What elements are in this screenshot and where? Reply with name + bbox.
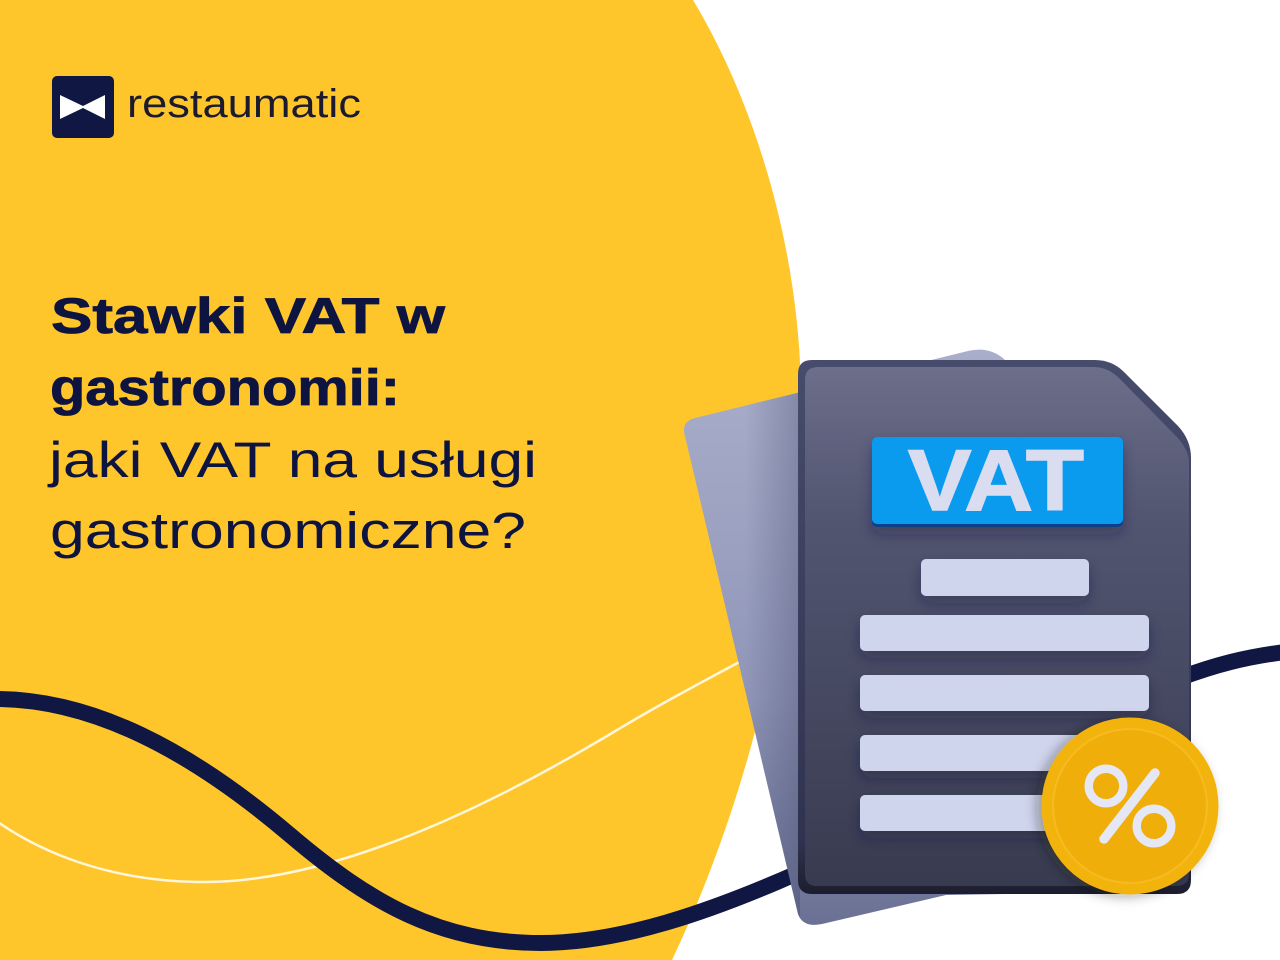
navy wave: [0, 652, 1280, 943]
title: [47, 288, 537, 559]
subtitle line 2: gastronomiczne?: [50, 502, 526, 559]
subtitle line 1: jaki VAT na usługi: [47, 432, 537, 488]
yellow blob: [0, 0, 801, 960]
logo: [52, 76, 361, 138]
percent coin: [1042, 718, 1218, 894]
back sheet: [684, 340, 1005, 930]
front sheet: [798, 360, 1191, 894]
VAT badge: [872, 433, 1123, 529]
VAT label: VAT: [908, 433, 1084, 529]
text lines: [860, 559, 1149, 831]
icon: percent sign: [1089, 769, 1171, 843]
title line 2: gastronomii:: [50, 359, 400, 416]
title line 1: Stawki VAT w: [51, 288, 445, 344]
logo icon: bow tie: [52, 76, 114, 138]
illustration: VAT document: [684, 340, 1218, 930]
logo wordmark: restaumatic: [127, 82, 361, 126]
thin white wave: [0, 659, 745, 882]
